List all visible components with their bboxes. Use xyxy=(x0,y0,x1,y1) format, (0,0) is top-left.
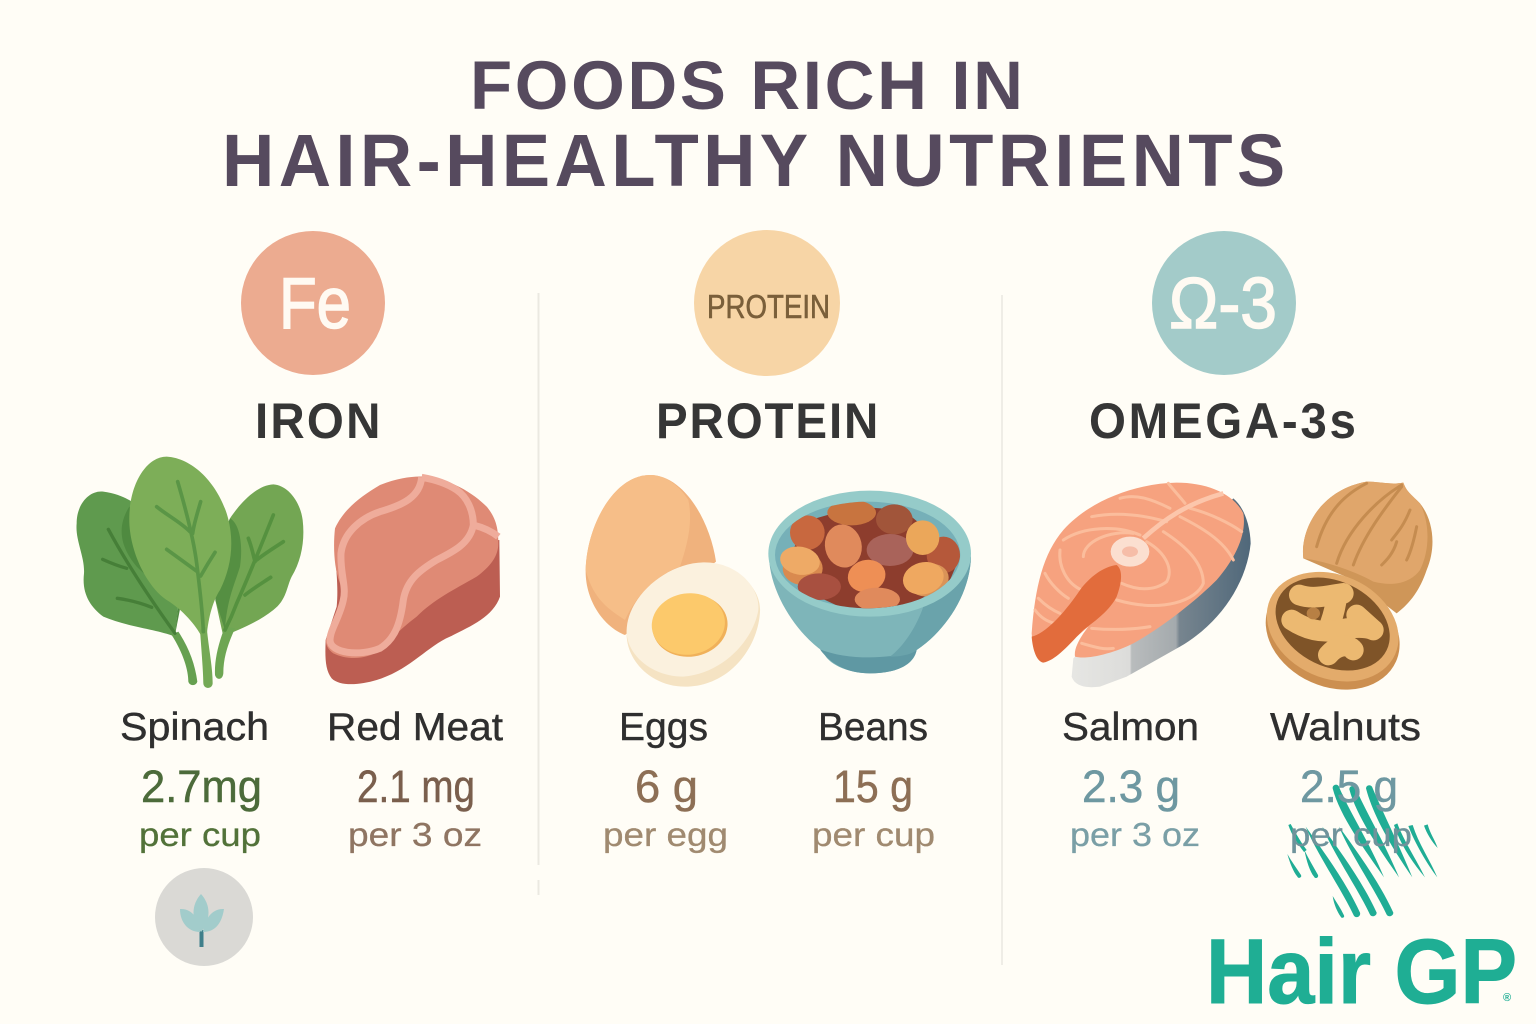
label: beans: Beans xyxy=(818,706,928,749)
label: red meat: Red Meat xyxy=(327,706,503,749)
label: walnuts: Walnuts xyxy=(1270,706,1421,749)
panel: protein xyxy=(586,230,971,853)
value: salmon omega-3: 2.3 g xyxy=(1082,761,1180,812)
serving: spinach: per cup xyxy=(139,816,261,853)
serving: beans: per cup xyxy=(812,816,935,853)
title xyxy=(222,47,1285,202)
serving: walnuts: per cup xyxy=(1290,816,1412,853)
logo wordmark: Hair GP xyxy=(1206,921,1517,1023)
label: eggs: Eggs xyxy=(619,706,708,749)
icon: salmon xyxy=(1032,483,1251,687)
heading: iron: IRON xyxy=(255,394,380,449)
heading: protein: PROTEIN xyxy=(656,394,878,449)
icon: eggs xyxy=(586,475,760,687)
icon: walnuts xyxy=(1248,482,1432,710)
panel: omega-3s xyxy=(1032,231,1432,853)
icon: Fe badge xyxy=(241,231,385,375)
value: beans protein: 15 g xyxy=(833,761,913,812)
label: spinach: Spinach xyxy=(120,706,269,749)
icon: hair strands xyxy=(1287,785,1438,918)
column divider: protein and omega-3 xyxy=(1001,295,1003,965)
registered mark: ® xyxy=(1503,992,1511,1004)
title: FOODS RICH IN xyxy=(470,47,1023,124)
value: red meat iron: 2.1 mg xyxy=(357,761,475,812)
icon: protein badge xyxy=(694,230,840,376)
icon: omega-3 badge: Ω-3 xyxy=(1169,264,1277,344)
value: spinach iron: 2.7mg xyxy=(141,761,262,812)
heading: omega-3s: OMEGA-3s xyxy=(1089,394,1356,449)
icon: red meat xyxy=(325,477,500,684)
panel: iron xyxy=(76,231,503,853)
value: eggs protein: 6 g xyxy=(635,761,698,812)
icon: bowl of beans xyxy=(768,491,971,673)
icon: protein badge: PROTEIN xyxy=(707,288,830,325)
label: salmon: Salmon xyxy=(1062,706,1199,749)
icon: small leaf badge xyxy=(155,868,253,966)
column divider: iron and protein xyxy=(538,293,540,895)
serving: red meat: per 3 oz xyxy=(348,816,482,853)
title: HAIR-HEALTHY NUTRIENTS xyxy=(222,119,1285,202)
serving: salmon: per 3 oz xyxy=(1070,816,1200,853)
logo: Hair GP xyxy=(1206,785,1517,1023)
value: walnuts omega-3: 2.5 g xyxy=(1300,761,1398,812)
serving: eggs: per egg xyxy=(603,816,728,853)
icon: Fe badge: Fe xyxy=(279,264,351,344)
icon: omega-3 badge xyxy=(1152,231,1296,375)
icon: spinach xyxy=(76,457,303,688)
